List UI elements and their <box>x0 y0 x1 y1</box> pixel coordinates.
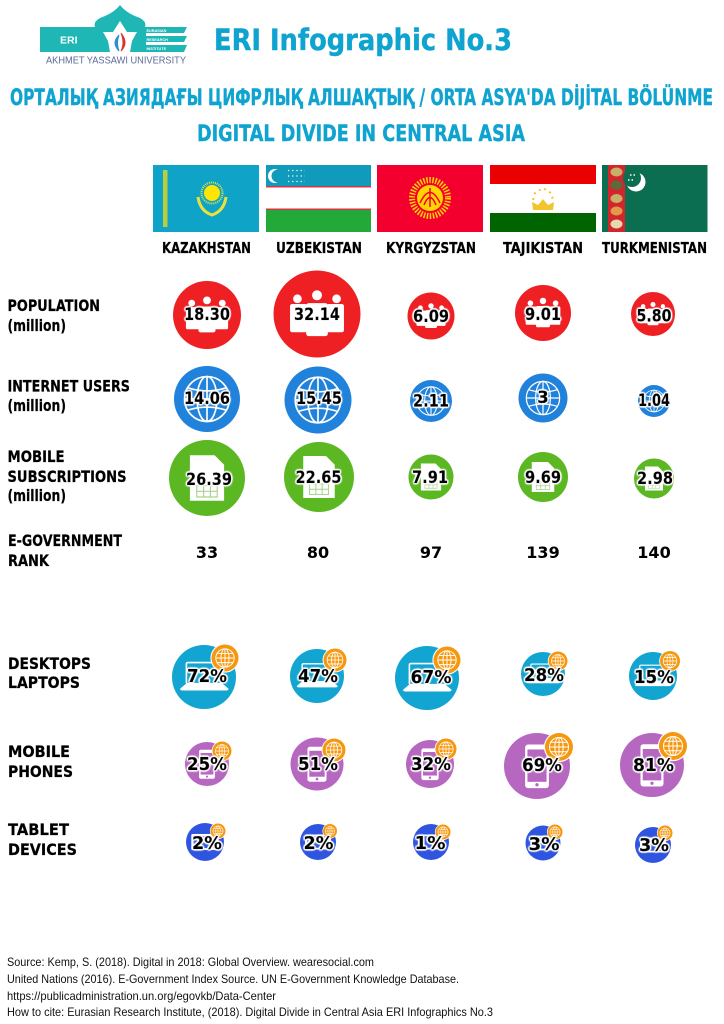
tablet: Kyrgyzstan <box>413 824 451 860</box>
row label: e-government rank: RANK <box>8 551 49 570</box>
row label: desktops laptops: LAPTOPS <box>8 673 80 692</box>
tablet: Uzbekistan: 2% <box>304 833 334 854</box>
country labels: UZBEKISTAN <box>276 239 362 257</box>
logo: INSTITUTE <box>146 47 167 51</box>
phone: Kazakhstan <box>185 741 232 786</box>
tablet: Kazakhstan: 2% <box>192 833 222 854</box>
row label: mobile phones: PHONES <box>8 762 73 781</box>
row label: population: POPULATION <box>8 296 100 315</box>
population: Turkmenistan <box>631 292 675 336</box>
heading: english title: DIGITAL DIVIDE IN CENTRAL ASIA <box>197 122 525 147</box>
source notes <box>7 955 493 1019</box>
phone: Kyrgyzstan <box>406 738 457 788</box>
source notes: https://publicadministration.un.org/egovkb/Data-Center <box>7 989 276 1003</box>
population: Uzbekistan <box>274 270 360 358</box>
internet: Tajikistan <box>518 374 568 422</box>
row label: internet users <box>8 376 130 415</box>
row label: mobile phones: MOBILE <box>8 742 70 761</box>
row label: internet users: (million) <box>8 396 66 415</box>
population: Kazakhstan: 18.30 <box>184 305 230 324</box>
population: Tajikistan <box>515 285 571 341</box>
country labels: TAJIKISTAN <box>503 239 583 257</box>
source notes: Source: Kemp, S. (2018). Digital in 2018: Global Overview. wearesocial.com <box>7 955 374 969</box>
e-government ranks: 97 <box>420 543 442 562</box>
row label: population: (million) <box>8 316 66 335</box>
desktop: Uzbekistan <box>290 648 347 703</box>
tablet: Kazakhstan <box>186 823 226 861</box>
internet: Kazakhstan <box>174 366 240 432</box>
title: ERI Infographic No.3 <box>214 23 512 57</box>
desktop: Kyrgyzstan: 67% <box>410 667 452 688</box>
internet: Kyrgyzstan <box>410 380 452 422</box>
mobile: Turkmenistan: 2.98 <box>637 469 673 488</box>
phone: Uzbekistan <box>290 738 346 790</box>
mobile: Kyrgyzstan <box>408 454 454 500</box>
flag: Turkmenistan <box>602 165 708 232</box>
phone: Turkmenistan <box>620 731 688 797</box>
row label: internet users: INTERNET USERS <box>8 376 130 396</box>
logo: RESEARCH <box>146 38 168 42</box>
row label: tablet devices: DEVICES <box>8 840 77 859</box>
desktop: Kazakhstan <box>172 643 240 709</box>
flag: Kyrgyzstan <box>377 165 483 232</box>
tablet: Uzbekistan <box>300 823 338 860</box>
mobile: Turkmenistan <box>634 458 674 498</box>
country labels <box>162 239 707 257</box>
mobile: Tajikistan: 9.69 <box>525 468 561 487</box>
mobile: Uzbekistan <box>284 442 354 512</box>
phone: Tajikistan: 69% <box>522 755 562 776</box>
source notes: United Nations (2016). E-Government Index Source. UN E-Government Knowledge Database. <box>7 972 459 986</box>
population: Kazakhstan <box>173 281 241 349</box>
row label: e-government rank <box>8 531 122 570</box>
row label: mobile subscriptions: SUBSCRIPTIONS <box>8 467 127 486</box>
internet: Turkmenistan: 1.04 <box>638 391 670 410</box>
source notes: How to cite: Eurasian Research Institute, (2018). Digital Divide in Central Asia ERI Infographics No.3 <box>7 1005 493 1019</box>
row label: mobile subscriptions: MOBILE <box>8 447 64 466</box>
e-government ranks: 139 <box>526 543 560 562</box>
row label: mobile subscriptions <box>8 447 127 505</box>
internet: Tajikistan: 3 <box>537 388 549 407</box>
phone: Turkmenistan: 81% <box>633 755 674 776</box>
phone: Uzbekistan: 51% <box>298 754 338 775</box>
e-government ranks: 140 <box>637 543 671 562</box>
tablet: Tajikistan: 3% <box>528 834 560 855</box>
country labels: KYRGYZSTAN <box>386 239 476 257</box>
tablet: Kyrgyzstan: 1% <box>414 833 446 854</box>
mobile: Kyrgyzstan: 7.91 <box>412 468 448 487</box>
internet: Uzbekistan: 15.45 <box>296 389 342 408</box>
phone: Kazakhstan: 25% <box>187 754 227 775</box>
desktop: Turkmenistan <box>629 650 681 700</box>
tablet: Turkmenistan: 3% <box>639 835 669 856</box>
row label: desktops laptops: DESKTOPS <box>8 654 91 673</box>
e-government ranks: 80 <box>307 543 329 562</box>
e-government ranks <box>196 543 671 562</box>
desktop: Tajikistan <box>521 651 568 696</box>
desktop: Turkmenistan: 15% <box>634 667 674 688</box>
mobile: Tajikistan <box>518 452 568 502</box>
population: Kyrgyzstan: 6.09 <box>413 307 449 326</box>
desktop: Kazakhstan: 72% <box>187 666 227 687</box>
population: Turkmenistan: 5.80 <box>636 306 672 326</box>
flag: Tajikistan <box>490 165 596 232</box>
desktop: Kyrgyzstan <box>395 645 462 710</box>
internet: Kazakhstan: 14.06 <box>184 389 230 408</box>
logo: ERI <box>60 34 78 46</box>
desktop: Uzbekistan: 47% <box>298 666 338 687</box>
flag: Kazakhstan <box>153 165 259 232</box>
row label: tablet devices <box>8 820 77 859</box>
row label: e-government rank: E-GOVERNMENT <box>8 531 122 550</box>
row label: tablet devices: TABLET <box>8 820 69 839</box>
row label: population <box>8 296 100 335</box>
logo: AKHMET YASSAWI UNIVERSITY <box>46 54 186 66</box>
mobile: Kazakhstan <box>169 440 245 516</box>
logo: EURASIAN <box>146 29 167 33</box>
country labels: KAZAKHSTAN <box>162 239 251 257</box>
logo <box>40 5 187 66</box>
population: Tajikistan: 9.01 <box>525 305 561 324</box>
mobile: Kazakhstan: 26.39 <box>186 470 232 489</box>
phone: Kyrgyzstan: 32% <box>411 754 451 775</box>
internet: Turkmenistan <box>638 385 670 417</box>
population: Uzbekistan: 32.14 <box>294 305 340 324</box>
e-government ranks: 33 <box>196 543 218 562</box>
phone: Tajikistan <box>504 732 574 799</box>
row label: mobile subscriptions: (million) <box>8 486 66 505</box>
tablet: Tajikistan <box>526 824 563 860</box>
row label: desktops laptops <box>8 654 91 692</box>
tablet: Turkmenistan <box>635 825 673 863</box>
flag: Uzbekistan <box>266 165 371 232</box>
population: Kyrgyzstan <box>408 292 454 340</box>
internet: Uzbekistan <box>284 366 352 434</box>
internet: Kyrgyzstan: 2.11 <box>413 392 449 410</box>
row label: mobile phones <box>8 742 73 781</box>
desktop: Tajikistan: 28% <box>524 665 564 686</box>
mobile: Uzbekistan: 22.65 <box>296 468 342 487</box>
